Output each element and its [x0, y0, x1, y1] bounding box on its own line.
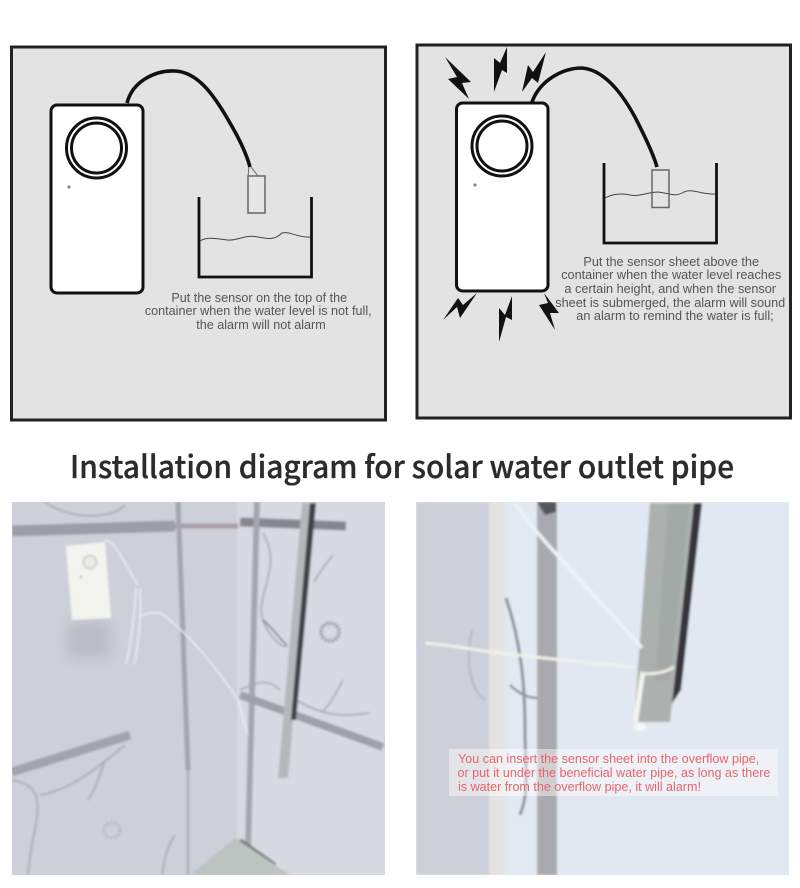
cable tie — [640, 667, 674, 674]
alarm unit — [66, 542, 111, 620]
caption: not full: the alarm will not alarm — [196, 318, 326, 332]
caption box — [449, 749, 778, 796]
floor corner — [190, 838, 290, 875]
sensor cable — [127, 71, 250, 167]
caption: full: Put the sensor sheet above the — [583, 255, 759, 269]
overflow pipe — [634, 503, 694, 722]
shadow behind pipe — [671, 503, 702, 705]
water container — [199, 197, 312, 277]
caption: full: container when the water level reaches — [561, 268, 781, 282]
sensor cable — [532, 68, 657, 167]
caption box: You can insert the sensor sheet into the overflow pipe, — [458, 752, 759, 766]
photo: alarm mounted on bathroom wall — [12, 502, 385, 875]
icon: lightning alarm bolts — [443, 47, 559, 342]
caption box: is water from the overflow pipe, it will alarm! — [458, 780, 701, 794]
icon: alarm device — [51, 105, 143, 293]
wall vine pattern — [12, 502, 370, 875]
caption box: or put it under the beneficial water pipe, as long as there — [458, 766, 770, 780]
photo: sensor tied to overflow pipe — [416, 502, 789, 875]
wall flower — [321, 623, 339, 641]
caption: full: an alarm to remind the water is full; — [576, 309, 774, 323]
title: Installation diagram for solar water outlet pipe — [70, 442, 734, 487]
panel: water level not full — [12, 47, 386, 420]
cable — [515, 503, 642, 648]
icon: alarm device sounding — [456, 103, 548, 291]
drain pipe — [278, 503, 312, 778]
caption: full: a certain height, and when the sensor — [564, 282, 777, 296]
water container with submerged sensor — [604, 163, 716, 243]
caption: not full: container when the water level is not full, — [145, 304, 372, 318]
caption: not full: Put the sensor on the top of the — [171, 291, 347, 305]
caption: full: sheet is submerged, the alarm will sound — [555, 296, 785, 310]
wall bands — [12, 502, 383, 875]
wall vines — [469, 598, 537, 815]
sensor sheet — [248, 167, 265, 213]
white cable — [105, 540, 248, 735]
panel: water level full — [417, 45, 790, 418]
